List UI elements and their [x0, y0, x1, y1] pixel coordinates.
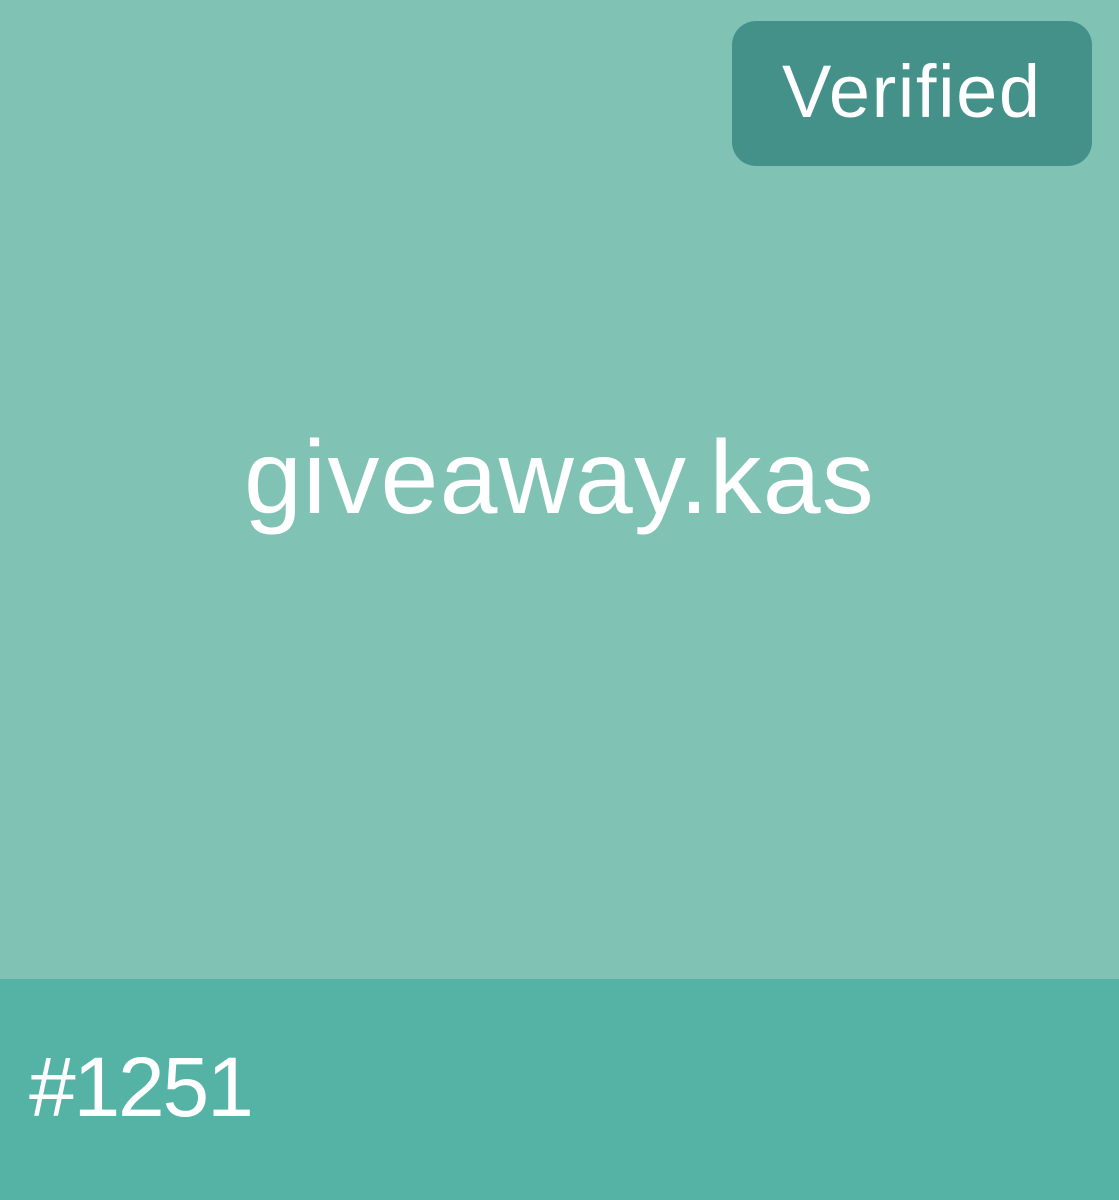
- badge: verified: [732, 21, 1092, 166]
- title: domain name: giveaway.kas: [244, 420, 875, 536]
- footer bar: [0, 979, 1119, 1200]
- badge label: Verified: [782, 50, 1042, 133]
- token number: #1251: [29, 1040, 252, 1134]
